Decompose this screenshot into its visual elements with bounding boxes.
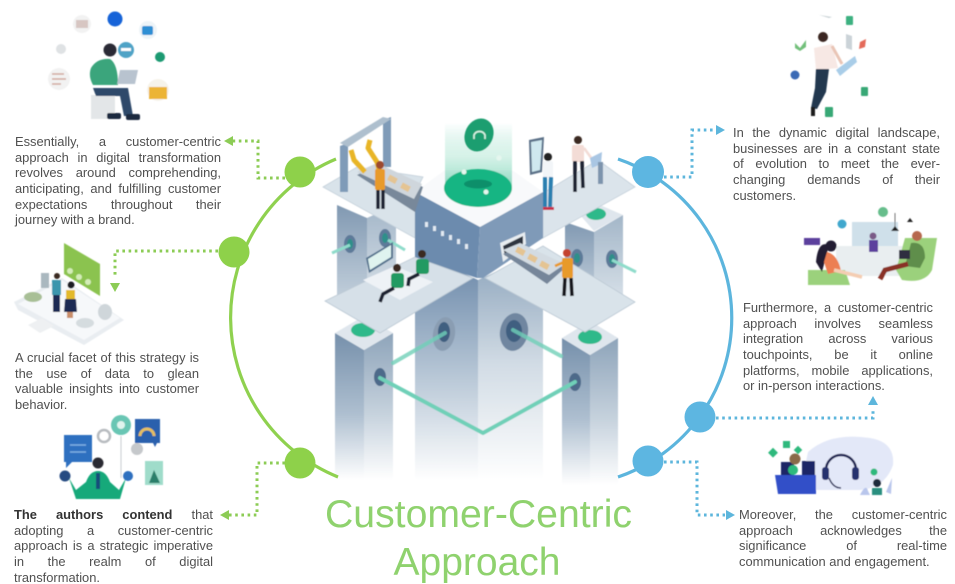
text block: data insights: valuable insights into customer <box>15 381 199 396</box>
back right pillar <box>565 205 636 300</box>
icon: man with laptop and social icons <box>48 12 169 120</box>
text block: real-time communication: communication and engagement. <box>739 554 930 569</box>
text block: digital landscape: businesses are in a constant state <box>733 141 940 156</box>
title: Approach <box>394 541 560 584</box>
text block: essentially: Essentially, a customer-centric <box>15 134 221 149</box>
blue arrow to first text <box>664 125 725 177</box>
text block: digital landscape: In the dynamic digital landscape, <box>733 125 940 140</box>
text block: authors contend: adopting a customer-centric <box>14 523 213 538</box>
green node 2 <box>218 236 250 268</box>
text block: authors contend <box>14 507 213 584</box>
icon: support agents with headset <box>768 437 893 495</box>
text block: essentially: journey with a brand. <box>15 212 135 227</box>
text block: data insights: behavior. <box>15 397 67 412</box>
text block: essentially <box>14 134 221 227</box>
man at console, top right <box>572 136 603 192</box>
teal connector lines <box>380 330 575 433</box>
blue node 1 <box>632 156 664 188</box>
blue node 2 <box>684 402 716 432</box>
top left platform <box>323 167 423 238</box>
blue node 3 <box>632 446 664 476</box>
text block: essentially: anticipating, and fulfilling customer <box>15 181 221 196</box>
green arc <box>231 159 338 477</box>
green hologram beam with headset badge <box>444 114 512 207</box>
tablet and woman, top right <box>529 137 554 210</box>
text block: digital landscape: of evolution to meet the ever- <box>733 156 940 171</box>
text block: real-time communication <box>739 507 947 569</box>
text block: seamless integration: touchpoints, be it online <box>743 347 933 362</box>
central isometric platform illustration <box>323 114 636 485</box>
worker in orange, top left <box>375 161 385 209</box>
icon: man flying with laptop <box>790 15 868 117</box>
icon: team reviewing data board <box>14 243 124 345</box>
green arrow to first text <box>224 136 285 178</box>
text block: digital landscape: customers. <box>733 188 796 203</box>
analysts at desk with monitor <box>363 242 433 302</box>
green arrow to third text <box>220 463 285 520</box>
text block: real-time communication: approach acknowledges the <box>739 523 947 538</box>
text block: data insights: A crucial facet of this strategy is <box>15 350 199 365</box>
text block: seamless integration <box>743 300 933 393</box>
text block: real-time communication: Moreover, the customer-centric <box>739 507 947 522</box>
icon: two people talking in lounge <box>804 207 937 285</box>
conveyor and robot arms, top left <box>340 117 423 212</box>
text block: data insights <box>15 350 199 412</box>
text block: seamless integration: platforms, mobile applications, <box>743 363 933 378</box>
text block: essentially: approach in digital transformation <box>15 150 221 165</box>
blue arc <box>618 159 732 477</box>
worker in orange, lower right <box>555 249 573 296</box>
text block: real-time communication: significance of real-time <box>739 538 947 553</box>
green arrow to second text <box>110 251 218 292</box>
text block: seamless integration: Furthermore, a customer-centric <box>743 300 933 315</box>
blue arrow to second text <box>716 396 878 418</box>
text block: essentially: revolves around comprehending, <box>15 165 221 180</box>
title: Customer-Centric <box>325 493 632 536</box>
bottom left platform <box>325 257 473 333</box>
text block: seamless integration: integration across various <box>743 331 933 346</box>
blue arrow to third text <box>664 462 735 520</box>
front right pillar <box>562 321 618 485</box>
text block: authors contend: in the realm of digital <box>14 554 213 569</box>
green node 1 <box>284 156 316 188</box>
text block: digital landscape: changing demands of their <box>733 172 940 187</box>
text block: seamless integration: approach involves seamless <box>743 316 933 331</box>
text block: authors contend: approach is a strategic imperative <box>14 538 213 553</box>
text block: seamless integration: or in-person interactions. <box>743 378 885 393</box>
text block: authors contend: The authors contend that <box>14 507 213 522</box>
text block: data insights: the use of data to glean <box>15 366 199 381</box>
text block: essentially: expectations throughout their <box>15 197 221 212</box>
title <box>325 493 632 584</box>
conveyor emerging from cube, lower right <box>500 232 565 284</box>
front left pillar <box>335 316 393 480</box>
bottom right platform <box>485 246 635 332</box>
top right platform <box>543 160 635 238</box>
central cube <box>415 170 543 278</box>
green node 3 <box>284 448 316 478</box>
central column <box>415 250 543 480</box>
text block: digital landscape <box>733 125 940 203</box>
back left pillar <box>332 205 405 300</box>
icon: consultant with metrics <box>60 415 163 499</box>
